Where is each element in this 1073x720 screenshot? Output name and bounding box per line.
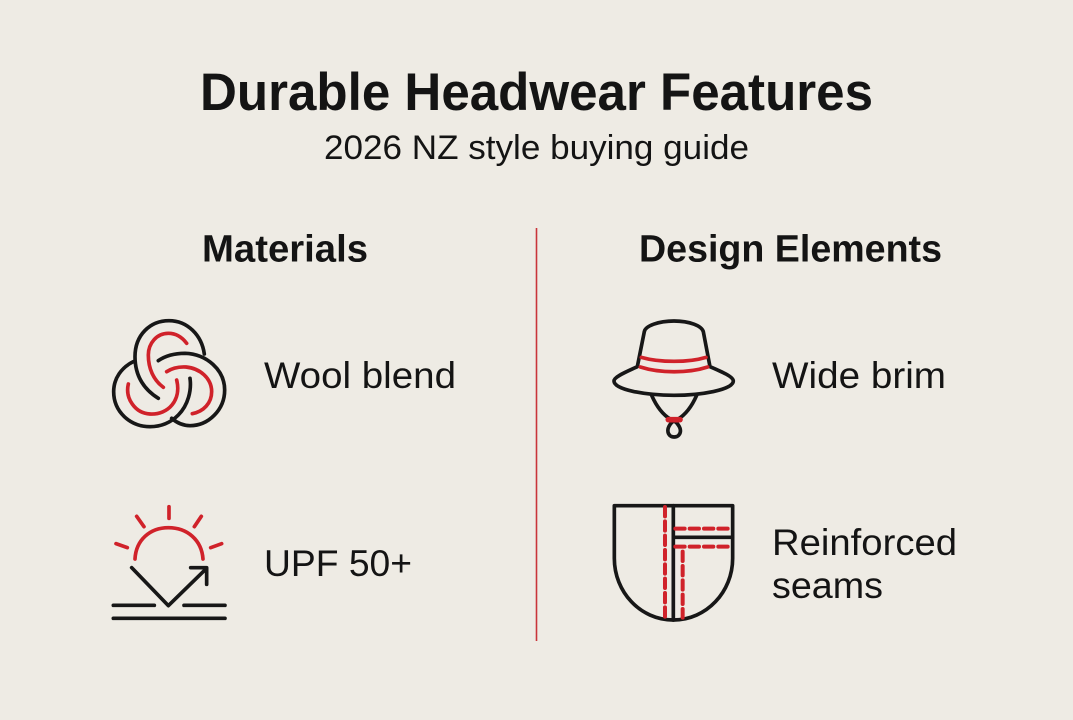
heading: materials: Materials	[202, 228, 368, 270]
column divider	[536, 228, 538, 641]
title: Durable Headwear Features	[200, 63, 873, 122]
label: reinforced seams: seams	[772, 564, 883, 606]
heading: design elements: Design Elements	[639, 228, 942, 270]
icon: wool knot	[114, 321, 225, 427]
label: wide brim: Wide brim	[772, 354, 946, 396]
icon: reinforced seam panel	[614, 506, 733, 620]
label: reinforced seams: Reinforced	[772, 521, 957, 563]
icon: wide-brim hat	[614, 321, 733, 437]
label: upf 50+: UPF 50+	[264, 542, 412, 584]
label: reinforced seams	[772, 521, 957, 606]
icon: sun with reflected UV arrow	[113, 507, 225, 618]
label: wool blend: Wool blend	[264, 354, 456, 396]
subtitle: 2026 NZ style buying guide	[324, 129, 749, 167]
